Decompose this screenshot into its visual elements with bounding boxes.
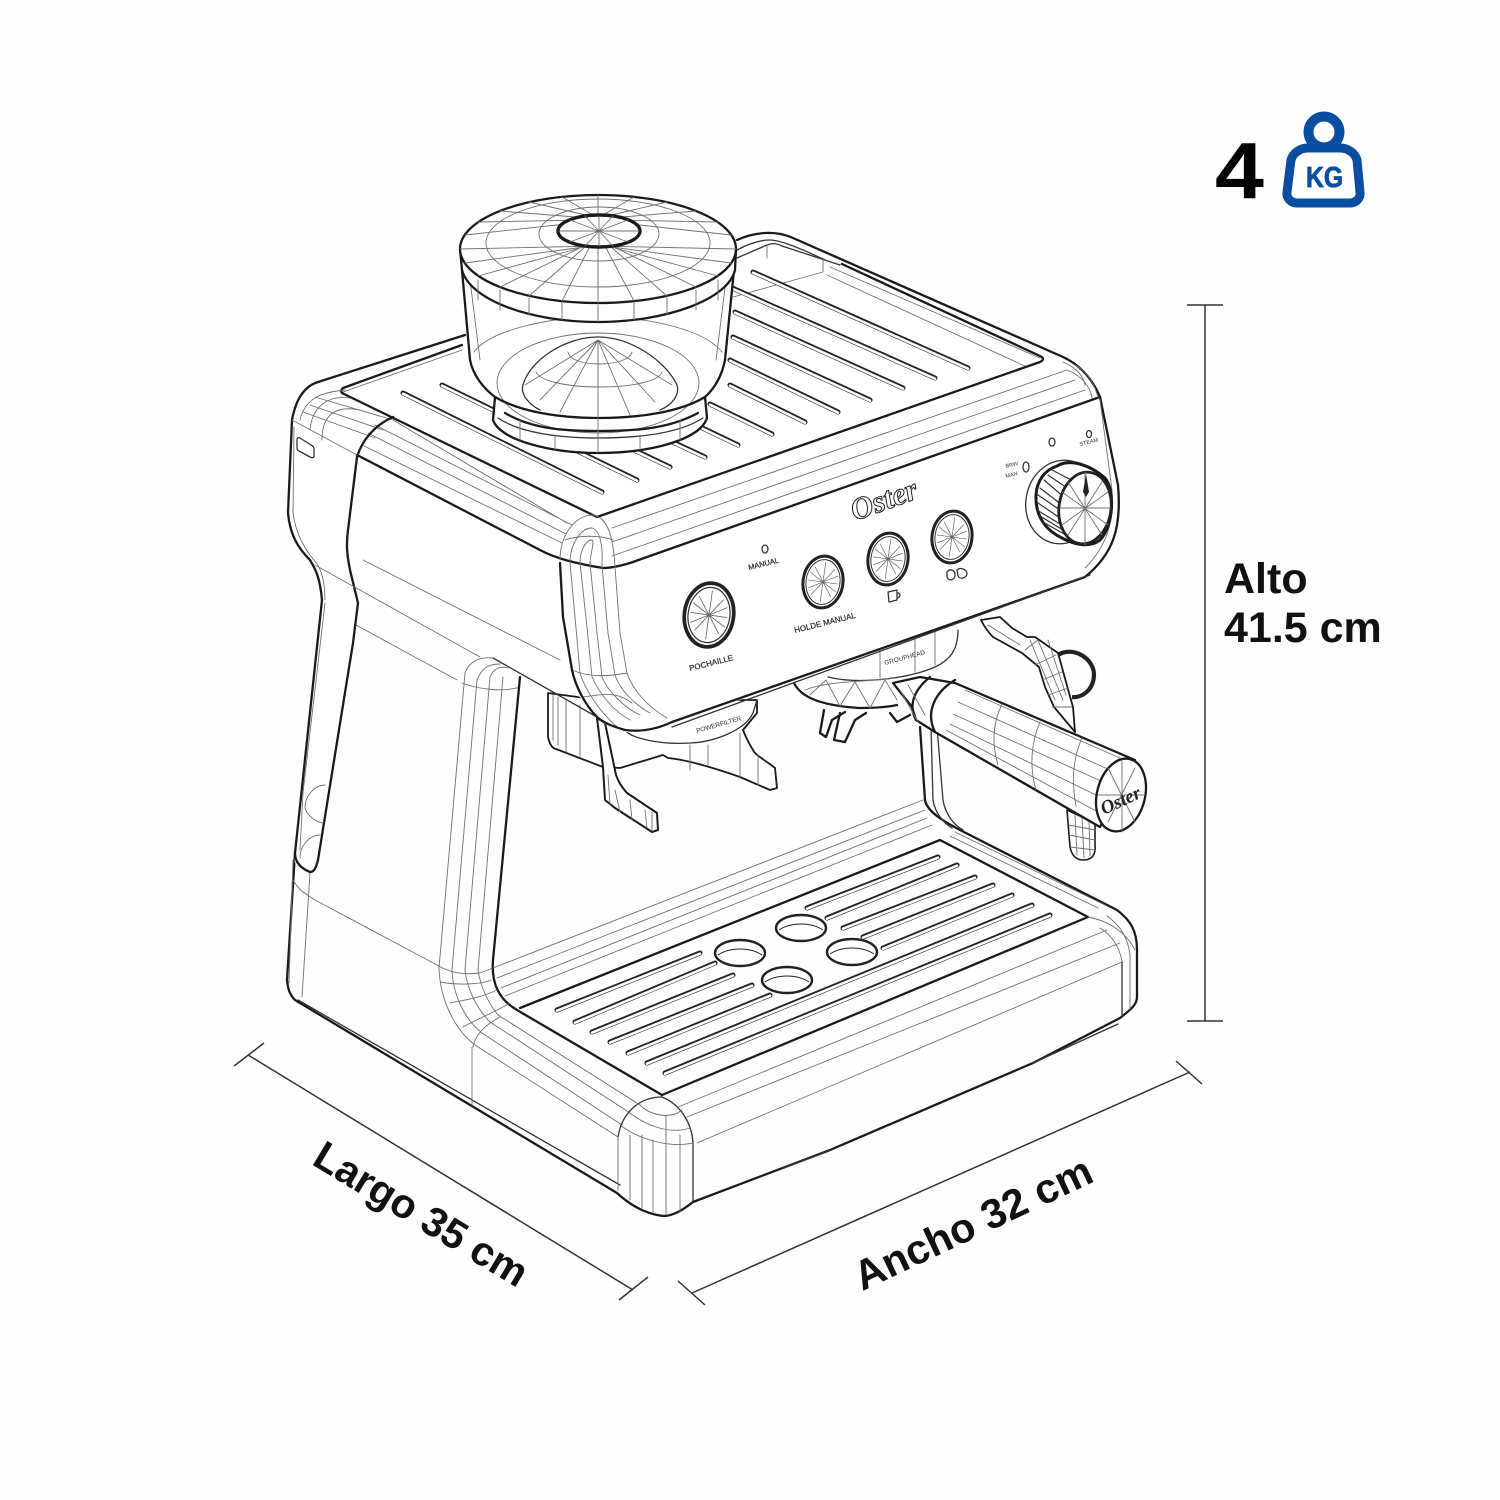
lid: [460, 249, 736, 322]
label on group head: POWERFILTER: [696, 715, 743, 735]
head outline: [288, 233, 1119, 722]
oster logo: Oster: [845, 471, 923, 528]
height label: 41.5 cm: [1224, 604, 1382, 652]
tray back rim lines: [493, 800, 932, 996]
inner left line: [293, 427, 325, 603]
selector knob: [1018, 453, 1116, 551]
base outline: [287, 727, 1137, 1216]
bowl inner ellipses: [474, 317, 722, 352]
portafilter handle: [893, 677, 1153, 837]
knob labels: BRW: [1005, 461, 1020, 470]
button 4: [929, 508, 975, 566]
left top band lines: [292, 420, 572, 543]
height label: Alto: [1224, 555, 1308, 603]
dome: [522, 337, 678, 410]
button 1: [680, 580, 738, 650]
tray plate: [520, 840, 1088, 1095]
weight icon: KG: [1306, 162, 1343, 194]
right group head: [794, 630, 958, 742]
right small forks: [820, 710, 910, 742]
handle end cap: [1089, 753, 1153, 837]
left fork arm: [597, 718, 658, 832]
side seam: [347, 417, 393, 603]
button 2: [800, 553, 846, 611]
lid top: [460, 195, 736, 303]
right group head: GROUPHEAD: [884, 649, 926, 667]
machine head: [288, 233, 1119, 733]
side panel lines: [315, 560, 560, 680]
grate frame: [341, 264, 1043, 517]
knob labels: MAN: [1005, 471, 1018, 480]
icon: cup: [888, 590, 900, 602]
icon: two cups: [947, 569, 967, 580]
control label indicator: [747, 545, 780, 572]
weight number: 4: [1215, 126, 1264, 215]
rear wire column: [931, 727, 963, 830]
back left corner: [300, 390, 393, 440]
knob labels: STEAM: [1079, 437, 1099, 448]
base left verticals: [289, 860, 310, 997]
base bottom double line: [298, 1000, 1118, 1185]
lid knob spokes: [559, 216, 639, 246]
head lower double line: [493, 575, 1090, 727]
water tank: [295, 600, 358, 872]
control label indicator: MANUAL: [747, 556, 780, 572]
front top band lines: [612, 370, 1085, 556]
button 3: [865, 530, 911, 588]
band lower thick line: [357, 397, 1100, 568]
control label centre: HOLDE MANUAL: [793, 611, 857, 635]
icon: weight 4 kg: [1215, 116, 1360, 215]
base and drip tray: [287, 658, 1137, 1216]
steam ring: [1058, 652, 1094, 697]
top grate slots: [403, 272, 968, 493]
right corner of head: [1063, 362, 1112, 568]
tray holes: [715, 915, 877, 993]
weight icon: [1287, 116, 1360, 203]
width dimension line: [678, 1061, 1202, 1305]
lid knob ring: [558, 215, 640, 247]
width label: Ancho 32 cm: [846, 1146, 1100, 1299]
length dimension line: [234, 1043, 648, 1300]
handle logo: Oster: [1097, 782, 1145, 820]
left group head ring: [625, 700, 757, 743]
base side line: [293, 880, 493, 1105]
left group head backplate: [548, 693, 777, 790]
grinder hopper: [460, 195, 736, 453]
steam wand: [981, 617, 1095, 860]
tray slots: [557, 857, 1050, 1074]
head front-left corner: [560, 515, 672, 731]
base front wire lines: [678, 930, 1122, 1143]
top rear rim lines: [737, 240, 840, 265]
head fill: [288, 233, 1119, 733]
right corner of base: [1088, 916, 1135, 1017]
front corner of base: [618, 1097, 693, 1214]
control label left: POCHAILLE: [688, 653, 734, 673]
small rectangle on side: [297, 438, 314, 458]
bowl base arcs: [495, 397, 705, 418]
tray right rim lines: [950, 832, 1105, 908]
bowl: [462, 270, 734, 453]
wand tip: [1067, 810, 1095, 860]
column: [439, 658, 662, 1137]
length label: Largo 35 cm: [306, 1132, 537, 1296]
knob labels: [1005, 430, 1099, 480]
height dimension line: [1187, 305, 1223, 1021]
